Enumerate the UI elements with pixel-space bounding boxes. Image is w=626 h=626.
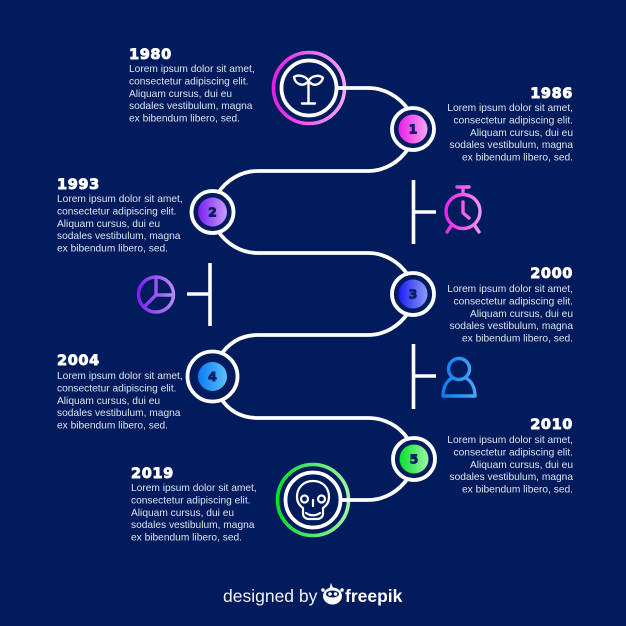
text block: 2010: sodales vestibulum, magna xyxy=(450,472,573,483)
text block: 1986: consectetur adipiscing elit. xyxy=(454,116,573,126)
text block: 1980: consectetur adipiscing elit. xyxy=(129,76,248,88)
text block: 2000: sodales vestibulum, magna xyxy=(450,321,573,332)
node 3: 3 xyxy=(409,286,417,302)
text block: 1986 xyxy=(447,86,573,164)
text block: 1980 xyxy=(129,47,255,124)
text block: 2019: consectetur adipiscing elit. xyxy=(131,496,250,506)
text block: 2004: consectetur adipiscing elit. xyxy=(57,384,176,394)
text block: 1993: 1993 xyxy=(57,177,100,193)
icon: skull xyxy=(297,481,329,519)
text block: 2004: sodales vestibulum, magna xyxy=(57,408,181,419)
text block: 1980: ex bibendum libero, sed. xyxy=(129,114,240,124)
text block: 1993: Aliquam cursus, dui eu xyxy=(57,219,160,230)
text block: 2004: ex bibendum libero, sed. xyxy=(57,420,168,432)
text block: 2019: 2019 xyxy=(131,466,174,482)
text block: 2004: Lorem ipsum dolor sit amet, xyxy=(57,371,183,382)
text block: 1993: consectetur adipiscing elit. xyxy=(57,206,176,218)
text block: 2000: 2000 xyxy=(530,266,573,282)
text block: 1986: 1986 xyxy=(530,86,573,102)
text block: 2019: ex bibendum libero, sed. xyxy=(131,532,242,544)
icon: freepik mascot xyxy=(321,583,344,604)
node 2: 2 xyxy=(208,204,217,220)
node 5 xyxy=(393,438,435,480)
icon: clock xyxy=(446,187,480,232)
node 5: 5 xyxy=(410,452,418,466)
text block: 2004: Aliquam cursus, dui eu xyxy=(57,396,160,407)
text block: 2010: 2010 xyxy=(530,417,573,433)
text block: 2010: Lorem ipsum dolor sit amet, xyxy=(447,435,573,446)
text block: 1980: Lorem ipsum dolor sit amet, xyxy=(129,64,255,75)
node 2 xyxy=(192,191,234,233)
footer: freepik credit xyxy=(223,583,403,606)
text block: 2004 xyxy=(57,353,183,432)
node 1: 1 xyxy=(409,122,417,136)
text block: 2010 xyxy=(447,417,573,496)
node 3 xyxy=(392,273,434,315)
icon: pie chart xyxy=(138,277,174,312)
text block: 1980: Aliquam cursus, dui eu xyxy=(129,89,232,100)
text block: 2019 xyxy=(131,466,257,544)
connector: person xyxy=(414,344,436,409)
text block: 1980: sodales vestibulum, magna xyxy=(129,101,253,112)
footer: freepik credit: freepik xyxy=(345,586,403,606)
end node: skull xyxy=(278,464,348,536)
text block: 1980: 1980 xyxy=(129,47,172,63)
text block: 2019: Lorem ipsum dolor sit amet, xyxy=(131,483,257,494)
connector: clock xyxy=(414,180,436,244)
timeline path xyxy=(218,88,408,500)
text block: 2010: consectetur adipiscing elit. xyxy=(454,448,573,458)
text block: 2000: consectetur adipiscing elit. xyxy=(454,296,573,308)
node 4 xyxy=(188,352,238,402)
text block: 1993: ex bibendum libero, sed. xyxy=(57,244,168,254)
text block: 1986: sodales vestibulum, magna xyxy=(450,140,573,151)
text block: 1986: ex bibendum libero, sed. xyxy=(462,152,573,164)
text block: 1993: sodales vestibulum, magna xyxy=(57,231,181,242)
text block: 1993: Lorem ipsum dolor sit amet, xyxy=(57,194,183,205)
connector: pie chart xyxy=(187,263,210,326)
text block: 2004: 2004 xyxy=(57,353,100,369)
text block: 2010: Aliquam cursus, dui eu xyxy=(470,460,573,471)
start node: sprout xyxy=(274,52,344,124)
text block: 2000: Aliquam cursus, dui eu xyxy=(470,309,573,320)
node 1 xyxy=(392,108,434,150)
text block: 1986: Lorem ipsum dolor sit amet, xyxy=(447,103,573,114)
text block: 1986: Aliquam cursus, dui eu xyxy=(470,128,573,139)
icon: person xyxy=(443,358,475,396)
node 4: 4 xyxy=(208,369,217,384)
text block: 1993 xyxy=(57,177,183,254)
text block: 2010: ex bibendum libero, sed. xyxy=(462,484,573,496)
text block: 2019: sodales vestibulum, magna xyxy=(131,520,255,531)
text block: 2019: Aliquam cursus, dui eu xyxy=(131,508,234,519)
text block: 2000: ex bibendum libero, sed. xyxy=(462,334,573,344)
icon: sprout xyxy=(294,76,323,104)
text block: 2000 xyxy=(447,266,573,344)
footer: freepik credit: designed by xyxy=(223,586,318,606)
text block: 2000: Lorem ipsum dolor sit amet, xyxy=(447,284,573,295)
